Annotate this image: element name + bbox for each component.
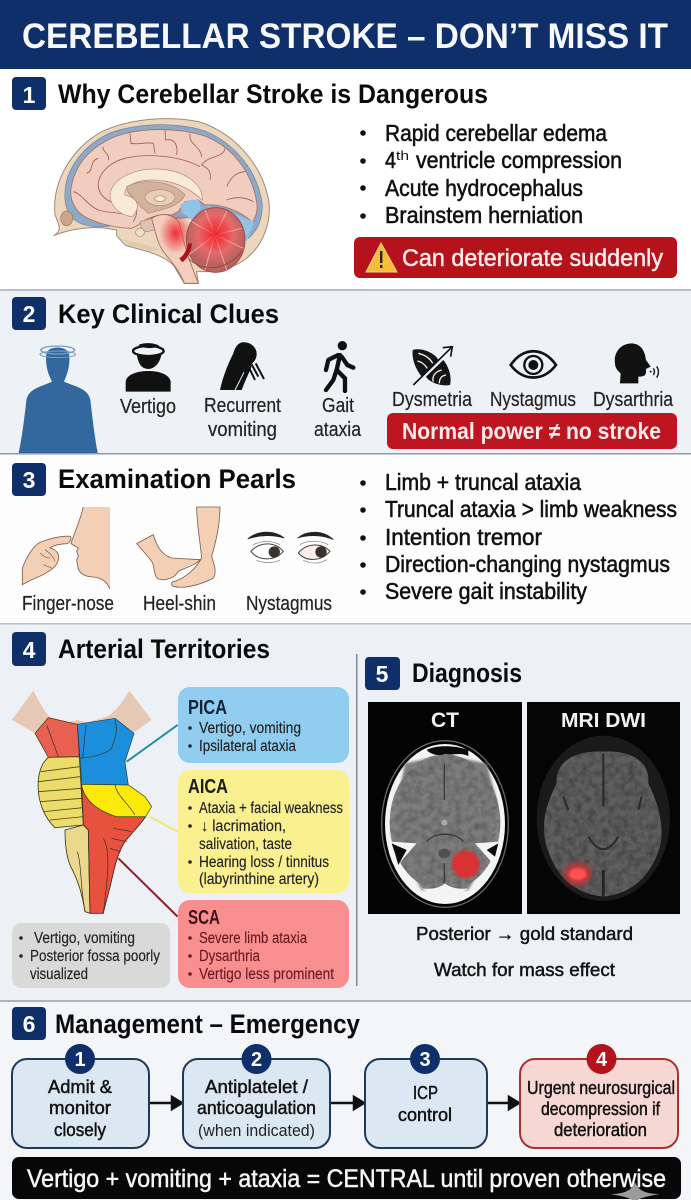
step 3 box: ICP	[413, 1083, 438, 1103]
card: PICA: PICA	[188, 697, 227, 719]
step 2 box	[183, 1044, 330, 1148]
section 2 heading: Key Clinical Clues	[58, 299, 279, 329]
section 3 heading: Examination Pearls	[58, 464, 296, 494]
exam labels: Finger-nose	[22, 593, 114, 615]
image: CT scan: CT	[431, 709, 459, 732]
note: CT limitations: visualized	[30, 966, 88, 983]
card: AICA: Hearing loss / tinnitus	[199, 854, 329, 871]
arrow 3 to 4	[488, 1097, 519, 1109]
section 2 badge: 2	[23, 301, 35, 327]
diagnosis notes: Posterior → gold standard	[416, 924, 633, 944]
card: PICA	[178, 687, 349, 763]
card: AICA: salivation, taste	[199, 836, 292, 853]
connector: SCA	[118, 858, 178, 917]
section 3 badge: 3	[23, 467, 35, 493]
step 2 box: (when indicated)	[198, 1122, 315, 1140]
icon: dysarthria speaking head	[615, 343, 658, 383]
section 5 badge	[365, 657, 400, 690]
panel 5: diagnosis	[365, 657, 680, 980]
step 1 box: closely	[54, 1120, 106, 1140]
image: CT scan	[368, 702, 522, 914]
section 6 badge: 6	[23, 1011, 35, 1037]
card: SCA: Dysarthria	[199, 948, 260, 965]
danger bullet list: Rapid cerebellar edema	[385, 120, 607, 146]
icon: nystagmus eye	[511, 351, 556, 377]
step 4 box: decompression if	[541, 1099, 661, 1119]
title banner	[0, 0, 691, 69]
icon: dysmetria	[412, 347, 452, 385]
card: AICA: (labyrinthine artery)	[199, 871, 319, 888]
illustration: finger-nose test	[22, 507, 110, 589]
section 3 badge	[12, 463, 46, 496]
clue labels: vomiting	[208, 419, 277, 441]
note: CT limitations: Posterior fossa poorly	[30, 948, 160, 965]
note: CT limitations: Vertigo, vomiting	[34, 930, 135, 947]
illustration: heel-shin test	[137, 507, 220, 587]
step 4 box	[520, 1044, 678, 1148]
clue labels: Vertigo	[120, 396, 176, 418]
exam labels	[22, 593, 332, 615]
illustration: nystagmus eyes	[248, 532, 333, 563]
connector: PICA	[127, 725, 178, 762]
brainstem and cerebellum territory diagram	[12, 691, 178, 917]
section 4 badge	[12, 632, 46, 666]
note: CT limitations	[12, 923, 170, 988]
section 2 badge	[12, 297, 46, 330]
warning callout: Can deteriorate suddenly	[402, 245, 663, 272]
examination bullet list: Limb + truncal ataxia	[385, 469, 581, 495]
clue labels: Dysmetria	[392, 389, 473, 411]
card: PICA: Ipsilateral ataxia	[199, 738, 296, 755]
step 4 box: 4	[596, 1049, 608, 1071]
examination bullet list: Intention tremor	[385, 524, 542, 550]
clue labels: Recurrent	[204, 395, 281, 417]
exam labels: Nystagmus	[246, 593, 332, 615]
brain anatomy illustration	[53, 119, 269, 283]
step 1 box	[12, 1044, 149, 1148]
warning callout	[354, 237, 677, 278]
card: SCA	[178, 900, 349, 988]
title banner: CEREBELLAR STROKE – DON’T MISS IT	[22, 17, 668, 56]
step 2 box: 2	[251, 1049, 262, 1071]
card: AICA: ↓ lacrimation,	[201, 818, 286, 835]
panel 1: why cerebellar stroke is dangerous	[0, 69, 691, 289]
step 4 box: deterioration	[554, 1120, 647, 1140]
diagnosis notes: Watch for mass effect	[434, 960, 615, 980]
diagnosis notes	[416, 924, 633, 980]
examination bullet list: Severe gait instability	[385, 578, 587, 604]
step 3 box: 3	[419, 1049, 431, 1071]
step 1 box: 1	[74, 1049, 86, 1071]
examination bullet list	[360, 469, 677, 604]
clue labels: Nystagmus	[490, 389, 576, 411]
danger bullet list: ventricle compression	[416, 147, 622, 173]
card: AICA: Ataxia + facial weakness	[199, 800, 343, 817]
section 6 heading: Management – Emergency	[55, 1009, 360, 1039]
danger bullet list: th	[396, 148, 409, 163]
panel 3: examination pearls	[0, 453, 691, 623]
clue labels: Dysarthria	[593, 389, 674, 411]
section 1 heading: Why Cerebellar Stroke is Dangerous	[58, 79, 488, 109]
examination bullet list: Direction-changing nystagmus	[385, 551, 670, 577]
clue labels: ataxia	[314, 419, 362, 441]
panel 2: key clinical clues	[0, 289, 691, 453]
connector: AICA	[150, 817, 178, 832]
danger bullet list: Brainstem herniation	[385, 202, 583, 228]
icon: vertigo	[126, 343, 171, 392]
card: SCA: Vertigo less prominent	[199, 966, 335, 983]
exam labels: Heel-shin	[143, 593, 216, 615]
danger bullet list: 4	[385, 147, 396, 173]
section 4 heading: Arterial Territories	[58, 634, 270, 664]
section 6 badge	[12, 1007, 46, 1040]
callout: normal power: Normal power ≠ no stroke	[402, 418, 661, 444]
section 5 heading: Diagnosis	[412, 658, 522, 688]
section 1 badge: 1	[23, 82, 36, 108]
card: AICA	[178, 770, 349, 893]
step 3 box	[365, 1044, 487, 1148]
step 1 box: monitor	[49, 1098, 111, 1118]
icon: vomiting figure	[220, 342, 264, 390]
callout: normal power	[387, 413, 677, 449]
image: MRI DWI scan: MRI DWI	[561, 710, 646, 732]
arrow 1 to 2	[150, 1097, 182, 1109]
step 2 box: Antiplatelet /	[205, 1077, 308, 1097]
panel 6: management emergency	[0, 1000, 691, 1200]
card: PICA: Vertigo, vomiting	[199, 720, 301, 737]
panel 4: arterial territories	[0, 623, 691, 1000]
icon: warning triangle	[366, 243, 397, 272]
clue labels: Gait	[322, 395, 354, 417]
card: SCA: SCA	[188, 907, 220, 929]
card: AICA: AICA	[188, 776, 228, 798]
danger bullet list: Acute hydrocephalus	[385, 175, 583, 201]
section 1 badge	[12, 77, 46, 110]
danger bullet list	[360, 120, 622, 228]
step 1 box: Admit &	[48, 1077, 112, 1097]
clue labels	[120, 389, 674, 441]
figure: patient silhouette with dizziness rings	[19, 346, 98, 453]
card: SCA: Severe limb ataxia	[199, 930, 307, 947]
section 4 badge: 4	[23, 637, 36, 663]
image: MRI DWI scan	[527, 702, 680, 914]
take-home message bar	[12, 1157, 681, 1200]
step 3 box: control	[398, 1105, 452, 1125]
section 5 badge: 5	[376, 661, 389, 687]
icon: gait ataxia walker	[326, 341, 353, 391]
step 4 box: Urgent neurosurgical	[527, 1078, 675, 1098]
step 2 box: anticoagulation	[197, 1098, 316, 1118]
arrow 2 to 3	[331, 1097, 364, 1109]
